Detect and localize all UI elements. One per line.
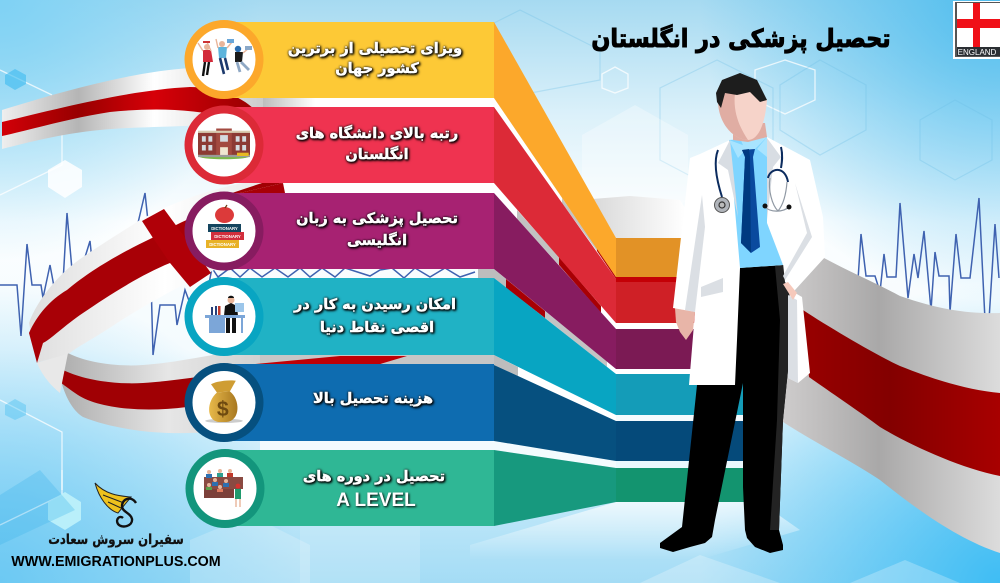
head xyxy=(716,73,767,142)
icon: man at desk xyxy=(205,296,245,333)
icon: apple on dictionaries: DICTIONARY xyxy=(209,242,236,247)
diagonal fold: yellow xyxy=(494,22,616,277)
panel: bar 6 A-level xyxy=(190,450,494,526)
text: bar 3 xyxy=(296,211,458,249)
diagonal fold: teal xyxy=(494,278,616,415)
text: bar 3: تحصیل پزشکی به زبان xyxy=(296,211,458,227)
coat xyxy=(673,137,825,385)
ribbon: lower loop xyxy=(37,340,320,433)
tie xyxy=(741,149,760,253)
ring 6 xyxy=(190,453,260,524)
heartbeat line: left xyxy=(0,193,475,355)
doctor figure xyxy=(660,73,825,553)
sleeve shading xyxy=(685,195,705,312)
logo name: سفیران سروش سعادت xyxy=(48,532,184,548)
ribbon fragments between bars xyxy=(232,98,800,583)
icon: money bag: $ xyxy=(217,397,229,421)
text: bar 1 xyxy=(288,41,462,77)
text: bar 2: انگلستان xyxy=(345,145,409,163)
panel: bar 4 job reach xyxy=(188,278,494,355)
icon: jumping students xyxy=(198,39,252,76)
panel: bar 3 English-language xyxy=(188,193,494,269)
shirt xyxy=(729,137,783,268)
diagonal fold: green xyxy=(494,450,616,526)
text: bar 4: اقصی نقاط دنیا xyxy=(320,320,434,336)
heartbeat line: right xyxy=(858,198,999,320)
icon: England flag badge: ENGLAND xyxy=(958,48,997,57)
panel: bar 1 academic visa xyxy=(188,22,494,98)
ribbon: right side xyxy=(780,258,1000,553)
ring 1 xyxy=(188,24,260,95)
text: bar 6: A LEVEL xyxy=(336,490,416,511)
hand in pocket xyxy=(783,282,797,300)
ring 3 xyxy=(188,196,260,266)
icon: apple on dictionaries: DICTIONARY xyxy=(211,226,238,231)
pocket xyxy=(701,278,723,297)
diagonal fold: red xyxy=(494,107,616,323)
icon: apple on dictionaries xyxy=(206,205,244,248)
hand left xyxy=(675,308,695,340)
ring 5 xyxy=(188,367,260,438)
stethoscope xyxy=(714,147,792,212)
icon: apple on dictionaries: DICTIONARY xyxy=(214,234,241,239)
text: bar 4 xyxy=(293,297,456,336)
diagonal fold: blue xyxy=(494,365,616,461)
trousers xyxy=(660,265,793,553)
text: bar 4: امکان رسیدن به کار در xyxy=(293,297,456,313)
horizontal stepped bands xyxy=(616,238,746,502)
ribbon: upper arc with cross xyxy=(29,176,300,363)
website: WWW.EMIGRATIONPLUS.COM xyxy=(11,554,221,570)
text: bar 1: کشور جهان xyxy=(335,61,419,77)
logo xyxy=(11,483,221,570)
text: bar 6: تحصیل در دوره های xyxy=(303,469,445,485)
text: bar 5: هزینه تحصیل بالا xyxy=(313,391,433,407)
ring 4 xyxy=(188,281,260,352)
text: bar 1: ویزای تحصیلی از برترین xyxy=(288,41,462,57)
icon: wing and swan xyxy=(95,483,136,526)
ring 2 xyxy=(188,110,260,180)
text: bar 2: رتبه بالای دانشگاه های xyxy=(296,124,458,142)
lapels xyxy=(718,140,738,217)
ribbon: England flag top strip xyxy=(2,68,282,149)
coat tail right xyxy=(788,290,810,383)
panel: bar 2 universities xyxy=(188,107,494,183)
text: bar 6 xyxy=(303,469,445,511)
text: bar 3: انگلیسی xyxy=(347,231,407,249)
icon: money bag xyxy=(205,380,243,423)
icon: England flag badge xyxy=(953,1,1000,59)
icon: classroom xyxy=(204,469,243,507)
text: bar 2 xyxy=(296,124,458,163)
icon: university building xyxy=(198,128,250,159)
panel: bar 5 high cost xyxy=(188,364,494,441)
title: تحصیل پزشکی در انگلستان xyxy=(591,24,891,53)
diagonal fold: purple xyxy=(494,193,616,369)
ribbon: fading centre segment xyxy=(580,196,705,240)
